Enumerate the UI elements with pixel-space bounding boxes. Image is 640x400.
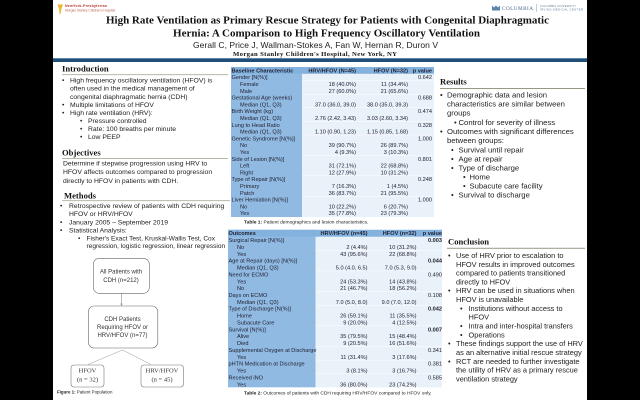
- methods bullets: January 2005 – September 2019: [69, 219, 168, 226]
- table 1: baseline characteristics: 27 (60.0%): [329, 89, 356, 95]
- conclusion bullets: RCT are needed to further investigate: [456, 357, 580, 366]
- table 1: baseline characteristics: 39 (90.7%): [329, 143, 356, 149]
- table 1: baseline characteristics: 37.0 (36.0, 39.0): [315, 102, 356, 108]
- results bullets: between groups:: [447, 136, 504, 145]
- table 2: outcomes: 0.585: [428, 375, 442, 381]
- table 1: baseline characteristics: 0.248: [418, 177, 432, 183]
- table 2: outcomes: 0.044: [428, 259, 443, 265]
- table 1: baseline characteristics: 38.0 (35.0, 39.3): [367, 102, 408, 108]
- table 2: outcomes: Age at Repair (days) [N(%)]: [228, 259, 298, 265]
- box: HRV/HFOV: HRV/HFOV: [146, 368, 179, 374]
- logo: Columbia: IRVING MEDICAL CENTER: [540, 8, 583, 12]
- table 1: baseline characteristics: 22 (68.8%): [381, 164, 408, 170]
- table 2: outcomes: 0.381: [428, 362, 442, 368]
- table 1: baseline characteristics: 31 (72.1%): [329, 164, 356, 170]
- flowchart: [71, 258, 184, 387]
- logo: NewYork-Presbyterian: NewYork-Presbyterian: [65, 4, 107, 8]
- results bullets: Survival until repair: [458, 145, 524, 154]
- table 2: outcomes: 5.0 (4.0, 6.5): [336, 266, 368, 272]
- table 1: baseline characteristics: HRV/HFOV (N=45): [308, 68, 356, 74]
- heading: results: Results: [440, 76, 467, 86]
- table 1: baseline characteristics: 10 (22.2%): [329, 204, 356, 210]
- table 1: baseline characteristics: 35 (77.8%): [329, 211, 356, 217]
- methods bullets: HFOV or HRV/HFOV: [69, 211, 133, 218]
- introduction bullets: Low PEEP: [88, 134, 121, 141]
- introduction bullets: •: [80, 126, 83, 133]
- results bullets: Control for severity of illness: [458, 118, 555, 127]
- title: Hernia: A Comparison to High Frequency Oscillatory Ventilation: [173, 28, 480, 40]
- panel: introduction: [62, 64, 228, 141]
- table 2: outcomes: 11 (35.5%): [390, 314, 417, 320]
- results bullets: •: [451, 164, 454, 172]
- table 2: outcomes: Outcomes: [228, 231, 256, 237]
- table 2: outcomes: Subacute Care: [237, 320, 274, 326]
- table 2: outcomes: 0.003: [428, 238, 442, 244]
- table 1: baseline characteristics: 36 (83.7%): [329, 191, 356, 197]
- box: CDH patients: HRV/HFOV (n=77): [97, 333, 148, 339]
- arrows: split: [88, 350, 151, 364]
- introduction bullets: Pressure controlled: [88, 118, 147, 125]
- methods bullets: •: [60, 228, 63, 234]
- objectives text: Determine if stepwise progression using HRV to: [63, 160, 207, 168]
- table 1: baseline characteristics: Primary: [240, 184, 259, 190]
- table 2: outcomes: HFOV (n=32): [383, 231, 417, 237]
- table 2: outcomes: Yes: [237, 252, 246, 258]
- table 1: baseline characteristics: 0.688: [418, 96, 432, 102]
- table 1: baseline characteristics: Left: [240, 164, 250, 170]
- affiliation: Morgan Stanley Children's Hospital, New York, NY: [233, 51, 397, 58]
- methods bullets: Fisher's Exact Test, Kruskal-Wallis Test, Cox: [86, 236, 216, 242]
- table 2: outcomes: 22 (68.8%): [389, 252, 417, 258]
- table 2: outcomes: No: [237, 286, 244, 292]
- table 2: outcomes: 3 (17.6%): [392, 355, 417, 361]
- table 1: baseline characteristics: Birth Weight (kg): [232, 109, 273, 115]
- box: all patients: [93, 258, 149, 293]
- table 1: baseline characteristics: Median (Q1, Q3): [240, 130, 282, 136]
- panel: objectives: [62, 148, 228, 185]
- table 2: outcomes: Yes: [237, 368, 246, 374]
- table 1: baseline characteristics: Liver Herniation [N(%)]: [232, 198, 289, 204]
- results bullets: •: [451, 190, 454, 200]
- figure caption: Figure 1: Patient Population: [57, 390, 113, 394]
- introduction bullets: •: [62, 102, 65, 109]
- table 2: outcomes: Supplemental Oxygen at Discharge: [228, 348, 316, 354]
- logo: Columbia: COLUMBIA: [502, 6, 533, 12]
- heading: conclusion: Conclusion: [448, 236, 489, 246]
- introduction bullets: congenital diaphragmatic hernia (CDH): [70, 94, 188, 101]
- results bullets: Type of discharge: [458, 164, 519, 172]
- table 1: baseline characteristics: 1 (4.5%): [387, 184, 408, 190]
- conclusion bullets: •: [448, 286, 451, 295]
- conclusion bullets: Intra and inter-hospital transfers: [468, 321, 573, 330]
- methods bullets: Statistical Analysis:: [69, 228, 127, 234]
- conclusion bullets: HFOV results in improved outcomes: [456, 260, 575, 269]
- panel: methods: [57, 190, 230, 394]
- results bullets: •: [451, 145, 454, 154]
- box: CDH patients: Requiring HFOV or: [97, 325, 148, 331]
- table 2: outcomes: 0.341: [428, 348, 442, 354]
- table 1: baseline characteristics: 26 (89.7%): [381, 143, 408, 149]
- table 2: outcomes: Yes: [237, 279, 246, 285]
- table 1: baseline characteristics: Median (Q1, Q3): [240, 116, 282, 122]
- table 2: outcomes: 16 (51.6%): [389, 341, 417, 347]
- conclusion bullets: compared to patients transitioned: [456, 269, 565, 278]
- introduction bullets: Multiple limitations of HFOV: [70, 102, 154, 109]
- table 1: baseline characteristics: Yes: [240, 150, 249, 156]
- methods bullets: regression, logistic regression, linear regression: [86, 243, 225, 250]
- results bullets: Age at repair: [458, 154, 503, 164]
- header bar: [53, 58, 587, 62]
- table 2: outcomes: 7.0 (5.3, 9.0): [385, 266, 417, 272]
- conclusion bullets: Operations: [468, 330, 505, 339]
- logo: Columbia: [492, 4, 583, 12]
- table 1: baseline characteristics: No: [240, 143, 247, 149]
- table 2: outcomes: 7.0 (5.0, 8.0): [336, 300, 368, 306]
- results bullets: Survival to discharge: [458, 190, 530, 200]
- box: HFOV: HFOV: [79, 368, 97, 374]
- table 1: baseline characteristics: 6 (20.7%): [384, 204, 408, 210]
- conclusion bullets: the utility of HRV as a primary rescue: [456, 366, 578, 375]
- table 1: baseline characteristics: 21 (65.6%): [381, 89, 408, 95]
- conclusion bullets: HRV can be used in situations when: [456, 286, 575, 295]
- table 2: outcomes: 36 (80.0%): [340, 382, 368, 388]
- table 2: outcomes: Home: [237, 314, 252, 320]
- results bullets: •: [463, 172, 466, 182]
- table 1: baseline characteristics: No: [240, 204, 247, 210]
- methods bullets: •: [60, 203, 63, 210]
- heading: methods: Methods: [64, 190, 97, 200]
- table 1: baseline characteristics: 23 (79.3%): [381, 211, 408, 217]
- table 2: outcomes: 21 (46.7%): [340, 286, 368, 292]
- results bullets: [440, 90, 574, 200]
- table 2: outcomes: No: [237, 245, 244, 251]
- table 2: outcomes: Alive: [237, 334, 249, 340]
- table 2: outcomes: Median (Q1, Q3): [237, 266, 279, 272]
- results bullets: •: [451, 154, 454, 164]
- table 2: outcomes: p value: [423, 231, 442, 237]
- logo: NewYork-Presbyterian: [58, 4, 115, 14]
- table 1: baseline characteristics: 12 (27.9%): [329, 170, 356, 176]
- conclusion bullets: as an alternative initial rescue strategy: [456, 348, 582, 357]
- conclusion bullets: HFOV is unavailable: [456, 295, 523, 304]
- introduction bullets: Rate: 100 breaths per minute: [88, 126, 176, 133]
- results bullets: •: [440, 90, 443, 100]
- table 1: baseline characteristics: 0.474: [418, 109, 432, 115]
- table 1: baseline characteristics: 7 (16.3%): [332, 184, 356, 190]
- introduction bullets: •: [62, 110, 65, 117]
- logo: Columbia: COLUMBIA UNIVERSITY: [540, 4, 576, 8]
- methods bullets: Retrospective review of patients with CDH requiring: [69, 203, 224, 210]
- table 1: baseline characteristics: Type of Repair [N(%)]: [232, 177, 286, 183]
- conclusion bullets: •: [460, 321, 463, 330]
- conclusion bullets: ventilation strategy: [456, 374, 518, 383]
- results bullets: •: [440, 127, 443, 136]
- table 2: outcomes: 14 (43.8%): [389, 279, 417, 285]
- table 2: outcomes: 9 (20.5%): [343, 341, 368, 347]
- box: all patients: All Patients with: [100, 270, 142, 276]
- table 1: baseline characteristics: Gender [N(%)]: [232, 75, 268, 81]
- table 2: outcomes: 2 (4.4%): [346, 245, 368, 251]
- table 2: outcomes: pHTN Medication at Discharge: [228, 362, 305, 368]
- results bullets: Demographic data and lesion: [447, 90, 547, 100]
- table 1: baseline characteristics: 2.76 (2.42, 3.43): [315, 116, 356, 122]
- table 2: outcomes: 35 (79.5%): [340, 334, 368, 340]
- conclusion bullets: •: [448, 251, 451, 260]
- table 2: outcomes: Died: [237, 341, 249, 347]
- table 2: outcomes: 0.007: [428, 327, 442, 333]
- conclusion bullets: Use of HRV prior to escalation to: [456, 251, 564, 260]
- table 1: baseline characteristics: Baseline Characteristic: [232, 68, 293, 74]
- conclusion bullets: •: [448, 339, 451, 348]
- conclusion bullets: •: [448, 357, 451, 366]
- table 1: baseline characteristics: 21 (95.5%): [381, 191, 408, 197]
- table 1: baseline characteristics: 18 (40.0%): [329, 82, 356, 88]
- introduction bullets: High rate ventilation (HRV):: [70, 110, 153, 117]
- table 2: outcomes: [228, 230, 443, 388]
- conclusion bullets: These findings support the use of HRV: [456, 339, 583, 348]
- table 2: outcomes: 9 (20.0%): [343, 320, 368, 326]
- table 1: baseline characteristics: Genetic Syndrome [N(%)]: [232, 136, 296, 142]
- introduction bullets: •: [80, 118, 83, 125]
- table 1 caption: Table 1: Patient demographics and lesion characteristics.: [244, 220, 368, 226]
- introduction bullets: High frequency oscillatory ventilation (HFOV) is: [70, 77, 213, 84]
- table 2: outcomes: Received iNO: [228, 375, 264, 381]
- table 1: baseline characteristics: Median (Q1, Q3): [240, 102, 282, 108]
- panel: results: [440, 76, 585, 200]
- box: HFOV: [71, 365, 104, 387]
- box: CDH patients: [88, 306, 158, 348]
- table 1: baseline characteristics: Female: [240, 82, 259, 88]
- table 1: baseline characteristics: 3 (10.3%): [384, 150, 408, 156]
- title: [106, 14, 549, 40]
- conclusion bullets: •: [460, 330, 463, 339]
- table 2: outcomes: Yes: [237, 355, 246, 361]
- table 2: outcomes: 18 (56.2%): [389, 286, 417, 292]
- table 1: baseline characteristics: 1.000: [418, 198, 432, 204]
- results bullets: groups: [447, 108, 471, 118]
- conclusion bullets: •: [460, 304, 463, 313]
- box: HRV/HFOV: [141, 365, 184, 387]
- table 2: outcomes: Yes: [237, 382, 246, 388]
- table 2: outcomes: 24 (53.3%): [340, 279, 368, 285]
- table 1: baseline characteristics: Side of Lesion [N(%)]: [232, 157, 285, 163]
- table 2: outcomes: 0.490: [428, 272, 442, 278]
- objectives text: HFOV affects outcomes compared to progression: [63, 169, 212, 176]
- table 2: outcomes: 11 (31.4%): [341, 355, 368, 361]
- introduction bullets: •: [62, 77, 65, 84]
- authors: Gerall C, Price J, Wallman-Stokes A, Fan W, Hernan R, Duron V: [193, 40, 438, 50]
- table 2: outcomes: Surgical Repair [N(%)]: [228, 238, 285, 244]
- table 2: outcomes: Days on ECMO: [228, 293, 268, 299]
- table 2: outcomes: 15 (48.4%): [389, 334, 417, 340]
- table 1: baseline characteristics: Right: [240, 170, 254, 176]
- results bullets: •: [463, 182, 466, 190]
- arrow: down: [120, 294, 122, 306]
- logo: NewYork-Presbyterian: Morgan Stanley Children's Hospital: [65, 8, 115, 12]
- table 2: outcomes: Median (Q1, Q3): [237, 300, 279, 306]
- table 1: baseline characteristics: 0.801: [418, 157, 432, 163]
- conclusion bullets: Institutions without access to: [468, 304, 563, 313]
- results bullets: Outcomes with significant differences: [447, 127, 574, 136]
- table 1: baseline characteristics: HFOV (N=32): [374, 68, 408, 74]
- table 2: outcomes: 0.108: [428, 293, 442, 299]
- table 1: baseline characteristics: Lung to Head Ratio: [232, 123, 280, 129]
- table 1: baseline characteristics: 1.000: [418, 136, 432, 142]
- table 1: baseline characteristics: 1.15 (0.85, 1.68): [367, 130, 408, 136]
- table 1: baseline characteristics: [231, 67, 434, 217]
- table 2 caption: Table 2: Outcomes of patients with CDH requiring HRV/HFOV compared to HFOV only.: [244, 391, 432, 397]
- conclusion bullets: directly to HFOV: [456, 277, 510, 286]
- methods bullets: •: [60, 219, 63, 226]
- heading: objectives: Objectives: [62, 148, 101, 158]
- box: HFOV: (n = 32): [77, 376, 98, 384]
- panel: conclusion: [447, 236, 585, 383]
- table 2: outcomes: 9.0 (7.0, 12.0): [382, 300, 417, 306]
- table 1: baseline characteristics: Patch: [240, 191, 254, 197]
- header band: [53, 4, 587, 62]
- table 1: baseline characteristics: 0.642: [418, 75, 432, 81]
- table 1: baseline characteristics: Yes: [240, 211, 249, 217]
- introduction bullets: •: [80, 134, 83, 141]
- table 2: outcomes: 0.042: [428, 307, 442, 313]
- table 2: outcomes: 10 (31.2%): [389, 245, 417, 251]
- table 1: baseline characteristics: 11 (34.4%): [381, 82, 408, 88]
- objectives text: [63, 160, 212, 185]
- heading: introduction: Introduction: [62, 64, 109, 74]
- results bullets: •: [454, 118, 457, 127]
- introduction bullets: often used in the medical management of: [70, 85, 195, 92]
- table 2: outcomes: 26 (59.1%): [340, 314, 368, 320]
- objectives text: directly to HFOV in patients with CDH.: [63, 178, 178, 185]
- table 2: outcomes: 43 (95.6%): [340, 252, 368, 258]
- table 2: outcomes: Need for ECMO: [228, 272, 269, 278]
- results bullets: Home: [470, 172, 490, 182]
- table 2: outcomes: 4 (12.5%): [392, 320, 417, 326]
- table 1: baseline characteristics: Gestational Age (weeks): [232, 96, 292, 102]
- box: HRV/HFOV: (n = 45): [152, 376, 172, 384]
- table 2: outcomes: HRV/HFOV (n=45): [320, 231, 368, 237]
- results bullets: characteristics are similar between: [447, 100, 565, 108]
- title: High Rate Ventilation as Primary Rescue Strategy for Patients with Congenital Diaphragmatic: [106, 14, 549, 26]
- table 1: baseline characteristics: p value: [413, 68, 432, 74]
- table 1: baseline characteristics: Male: [240, 89, 252, 95]
- table 1: baseline characteristics: 3.03 (2.60, 3.34): [367, 116, 408, 122]
- table 2: outcomes: Survival [N(%)]: [228, 327, 266, 333]
- conclusion bullets: [448, 251, 583, 383]
- introduction bullets: [62, 77, 213, 141]
- table 1: baseline characteristics: 4 (9.3%): [335, 150, 356, 156]
- box: CDH patients: CDH Patients: [104, 317, 141, 323]
- table 1: baseline characteristics: 0.328: [418, 123, 432, 129]
- methods bullets: [60, 203, 225, 250]
- methods bullets: •: [78, 236, 81, 242]
- results bullets: Subacute care facility: [470, 182, 543, 190]
- table 1: baseline characteristics: 10 (31.2%): [381, 170, 408, 176]
- table 2: outcomes: 3 (16.7%): [392, 368, 417, 374]
- table 2: outcomes: 23 (74.2%): [389, 382, 417, 388]
- table 2: outcomes: 3 (8.1%): [346, 368, 368, 374]
- box: all patients: CDH (n=212): [103, 278, 139, 284]
- conclusion bullets: HFOV: [468, 313, 489, 322]
- table 1: baseline characteristics: 1.10 (0.90, 1.23): [315, 130, 356, 136]
- table 2: outcomes: Type of Discharge [N(%)]: [228, 307, 291, 313]
